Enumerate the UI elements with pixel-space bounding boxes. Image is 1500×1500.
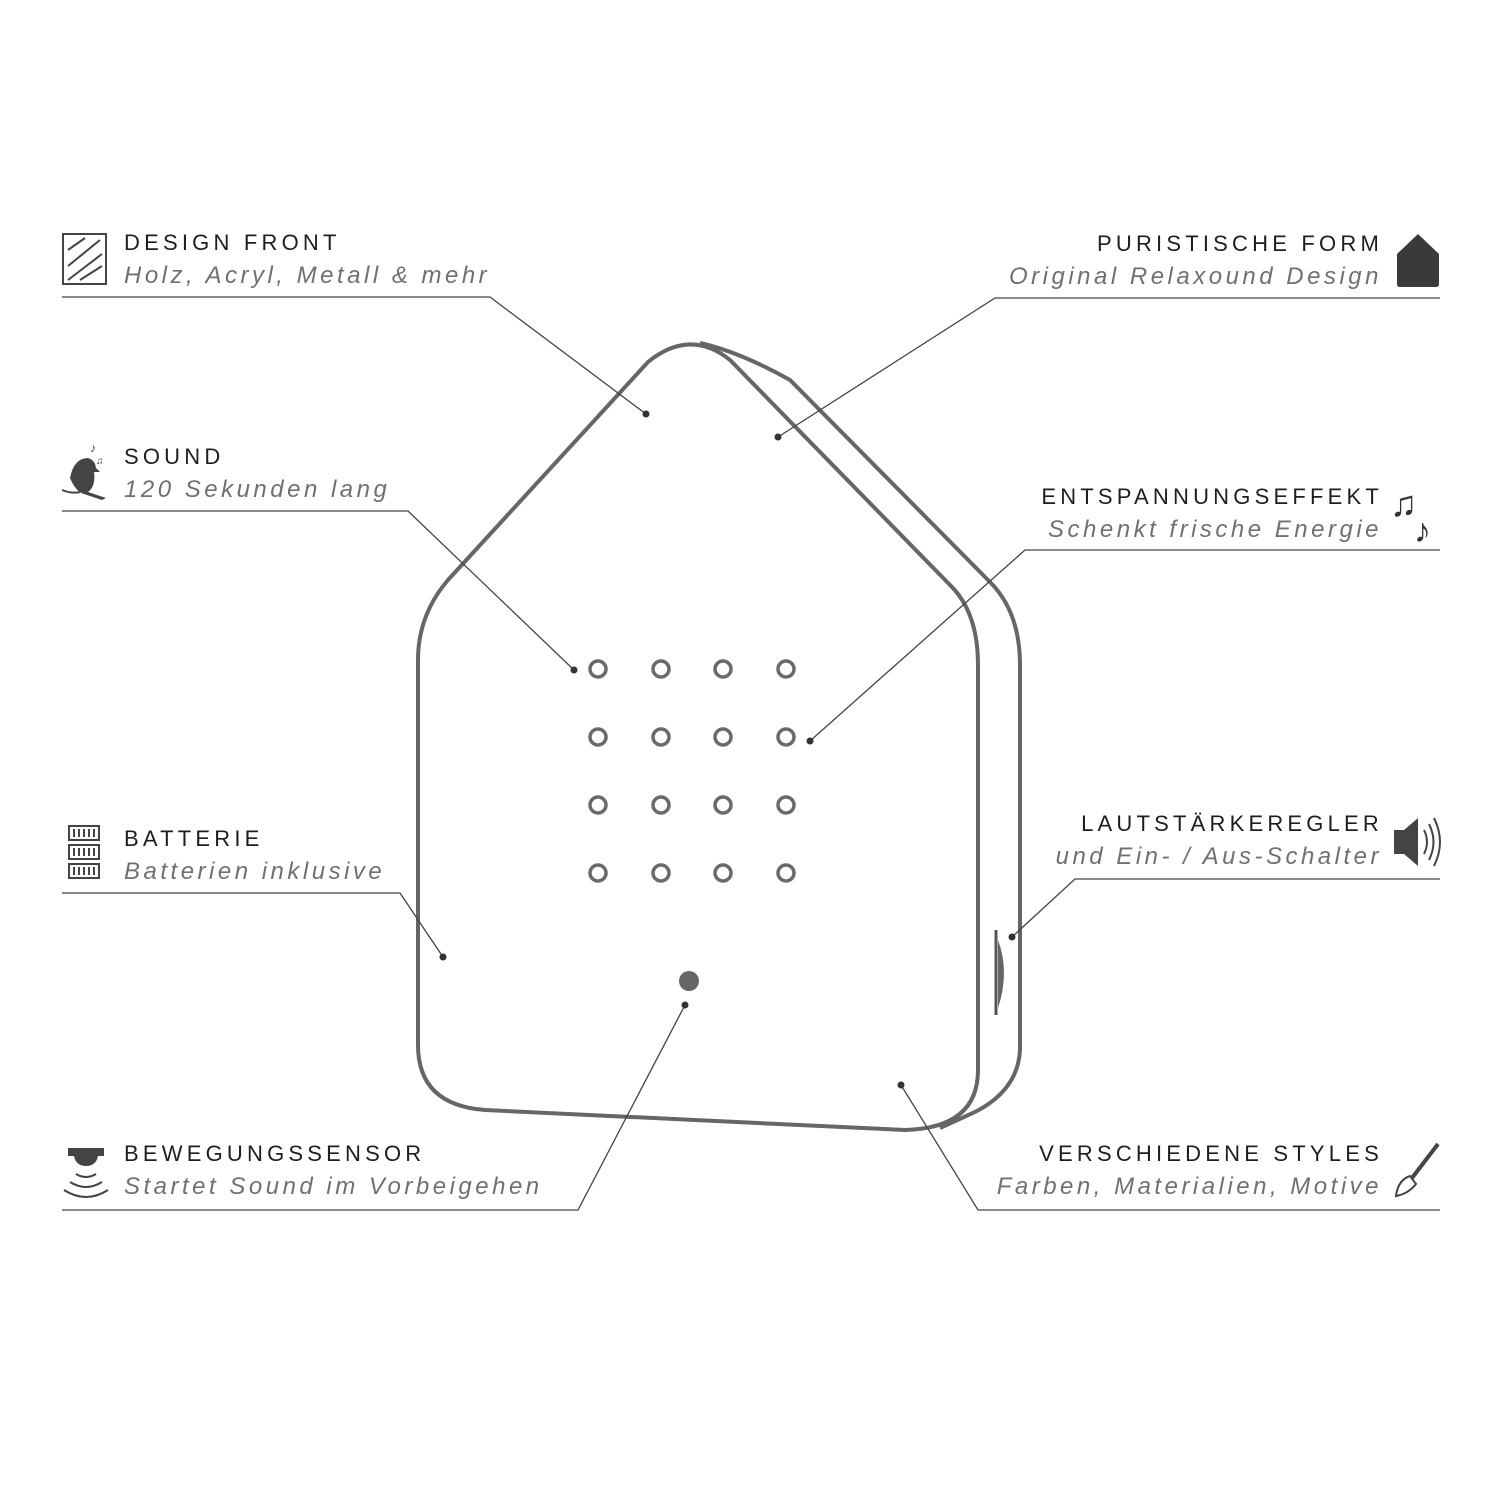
text: Startet Sound im Vorbeigehen xyxy=(124,1173,543,1200)
label: design front: DESIGN FRONT xyxy=(124,230,341,255)
text: und Ein- / Aus-Schalter xyxy=(1056,843,1382,870)
label: batterie: BATTERIE xyxy=(124,826,264,851)
text: Batterien inklusive xyxy=(124,858,385,885)
icon: music notes xyxy=(1390,483,1431,550)
label: lautstärkeregler: LAUTSTÄRKEREGLER xyxy=(1081,811,1383,836)
label: entspannungseffekt: ENTSPANNUNGSEFFEKT xyxy=(1041,484,1383,509)
motion sensor dot xyxy=(679,971,699,991)
icon: brush xyxy=(1396,1144,1438,1196)
icon: music notes: ♫ xyxy=(1390,483,1417,524)
label: puristische form: PURISTISCHE FORM xyxy=(1097,231,1383,256)
icon: speaker xyxy=(1394,818,1440,866)
text: Holz, Acryl, Metall & mehr xyxy=(124,262,490,289)
speaker holes xyxy=(590,661,794,881)
icon: bird: ♫ xyxy=(96,456,104,467)
leader lines xyxy=(62,297,1440,1210)
label: sound: SOUND xyxy=(124,444,224,469)
house back side xyxy=(700,343,1020,1128)
text: Original Relaxound Design xyxy=(1009,263,1382,290)
house front outline xyxy=(418,344,978,1130)
icon: design front glass xyxy=(63,234,106,284)
text: Schenkt frische Energie xyxy=(1048,516,1382,543)
icon: bird: ♪ xyxy=(90,441,96,455)
label: verschiedene styles: VERSCHIEDENE STYLES xyxy=(1039,1141,1383,1166)
icon: batteries xyxy=(69,826,99,878)
text: Farben, Materialien, Motive xyxy=(997,1173,1382,1200)
icon: music notes: ♪ xyxy=(1414,512,1431,550)
icon: motion sensor xyxy=(64,1148,108,1197)
icon: house xyxy=(1397,234,1439,287)
icon: bird xyxy=(62,441,106,500)
label: bewegungssensor: BEWEGUNGSSENSOR xyxy=(124,1141,425,1166)
text: 120 Sekunden lang xyxy=(124,476,390,503)
volume switch xyxy=(996,930,1004,1015)
